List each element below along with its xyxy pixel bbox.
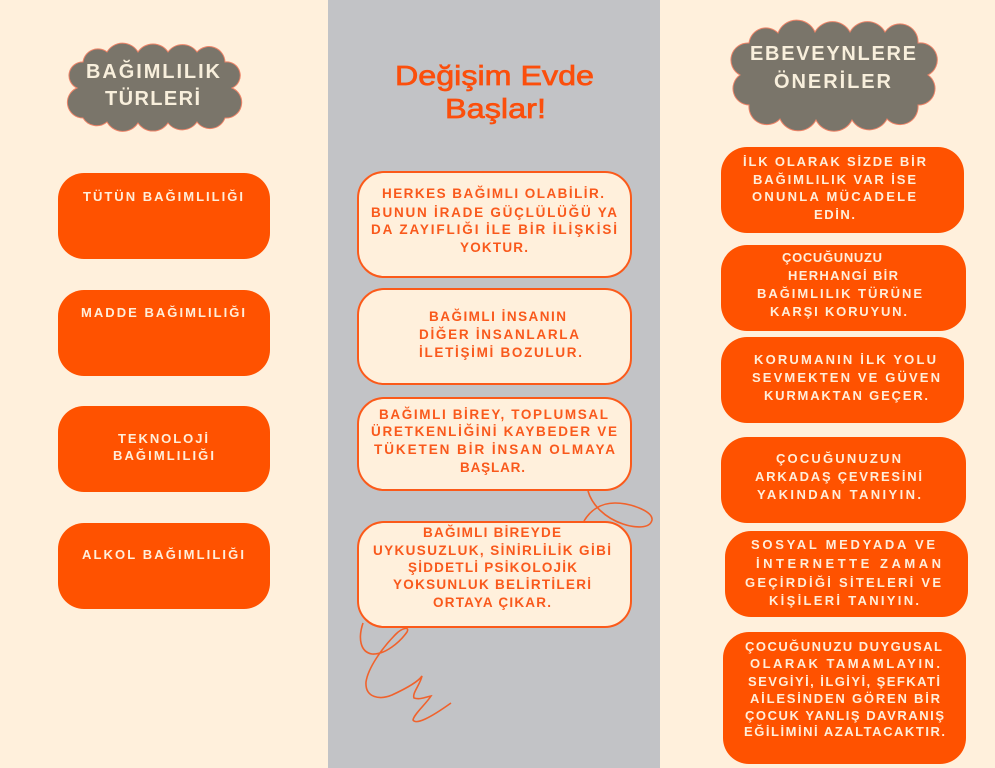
card: know their friends: ÇOCUĞUNUZUN — [776, 451, 901, 466]
card: loss of productivity — [358, 398, 631, 490]
card: withdrawal symptoms: ORTAYA ÇIKAR. — [433, 595, 551, 610]
title: Değişim Evde — [395, 60, 594, 91]
card: communication breaks down: BAĞIMLI İNSANIN — [429, 309, 566, 324]
panel: advice for parents — [721, 20, 968, 764]
card: emotional fulfilment: SEVGİYİ, İLGİYİ, ŞEFKATİ — [748, 674, 940, 689]
card: loss of productivity: BAĞIMLI BİREY, TOPLUMSAL — [379, 407, 608, 422]
card: know their friends: YAKINDAN TANIYIN. — [757, 487, 921, 502]
card: anyone can be addicted: YOKTUR. — [460, 240, 528, 255]
card: anyone can be addicted — [358, 172, 631, 277]
card: protect your child: ÇOCUĞUNUZU — [782, 250, 882, 265]
card: fight your own addiction: ONUNLA MÜCADELE — [752, 189, 916, 204]
decorative squiggle: lower — [360, 623, 451, 722]
card: substance addiction — [58, 290, 270, 376]
card: tobacco addiction — [58, 173, 270, 259]
card: loss of productivity: TÜKETEN BİR İNSAN OLMAYA — [374, 442, 615, 457]
card: know their friends: ARKADAŞ ÇEVRESİNİ — [755, 469, 922, 484]
card: emotional fulfilment — [723, 632, 966, 764]
heading: addiction types cloud: BAĞIMLILIK — [86, 59, 221, 83]
heading: advice for parents cloud — [731, 20, 937, 131]
panel: center messages — [358, 172, 631, 627]
card: withdrawal symptoms: YOKSUNLUK BELİRTİLERİ — [393, 577, 591, 592]
card: anyone can be addicted: DA ZAYIFLIĞI İLE BİR İLİŞKİSİ — [371, 222, 617, 237]
card: emotional fulfilment: ÇOCUĞUNUZU DUYGUSAL — [745, 639, 942, 654]
card: social media awareness — [725, 531, 968, 617]
panel: addiction types — [58, 43, 270, 609]
heading: addiction types cloud: TÜRLERİ — [105, 87, 200, 110]
card: alcohol addiction: ALKOL BAĞIMLILIĞI — [82, 547, 244, 562]
panel: center column background — [328, 0, 660, 768]
decorative squiggle: upper — [584, 491, 652, 527]
card: technology addiction — [58, 406, 270, 492]
card: love and trust: SEVMEKTEN VE GÜVEN — [752, 370, 940, 385]
card: social media awareness: İNTERNETTE ZAMAN — [756, 556, 941, 571]
card: emotional fulfilment: EĞİLİMİNİ AZALTACAKTIR. — [744, 724, 945, 739]
card: withdrawal symptoms: UYKUSUZLUK, SİNİRLİLİK GİBİ — [373, 543, 611, 558]
card: love and trust: KORUMANIN İLK YOLU — [754, 352, 936, 367]
card: loss of productivity: ÜRETKENLİĞİNİ KAYBEDER VE — [371, 424, 617, 439]
card: love and trust: KURMAKTAN GEÇER. — [764, 388, 928, 403]
card: withdrawal symptoms: ŞİDDETLİ PSİKOLOJİK — [408, 560, 577, 575]
card: communication breaks down — [358, 289, 631, 384]
title: Başlar! — [445, 93, 546, 124]
card: emotional fulfilment: ÇOCUK YANLIŞ DAVRANIŞ — [745, 708, 944, 723]
card: technology addiction: BAĞIMLILIĞI — [113, 448, 214, 463]
card: withdrawal symptoms — [358, 522, 631, 627]
card: communication breaks down: İLETİŞİMİ BOZULUR. — [419, 345, 582, 360]
card: fight your own addiction: EDİN. — [814, 207, 855, 222]
title — [395, 60, 594, 124]
card: protect your child: HERHANGİ BİR — [788, 268, 899, 283]
card: social media awareness: GEÇİRDİĞİ SİTELERİ VE — [745, 575, 941, 590]
card: protect your child: KARŞI KORUYUN. — [770, 304, 907, 319]
card: alcohol addiction — [58, 523, 270, 609]
card: substance addiction: MADDE BAĞIMLILIĞI — [81, 305, 245, 320]
card: emotional fulfilment: AİLESİNDEN GÖREN BİR — [750, 691, 941, 706]
card: fight your own addiction: İLK OLARAK SİZDE BİR — [743, 154, 927, 169]
card: protect your child — [721, 245, 966, 331]
card: fight your own addiction — [721, 147, 964, 233]
card: loss of productivity: BAŞLAR. — [460, 460, 525, 475]
heading: advice for parents cloud: EBEVEYNLERE — [750, 43, 916, 65]
card: anyone can be addicted: BUNUN İRADE GÜÇLÜLÜĞÜ YA — [371, 205, 617, 220]
heading: advice for parents cloud: ÖNERİLER — [774, 70, 892, 93]
card: love and trust — [721, 337, 964, 423]
card: withdrawal symptoms: BAĞIMLI BİREYDE — [423, 525, 561, 540]
card: technology addiction: TEKNOLOJİ — [118, 431, 208, 446]
card: social media awareness: KİŞİLERİ TANIYIN. — [769, 593, 919, 608]
card: know their friends — [721, 437, 966, 523]
card: tobacco addiction: TÜTÜN BAĞIMLILIĞI — [83, 189, 243, 204]
card: social media awareness: SOSYAL MEDYADA VE — [751, 537, 935, 552]
card: emotional fulfilment: OLARAK TAMAMLAYIN. — [750, 656, 940, 671]
card: communication breaks down: DİĞER İNSANLARLA — [419, 327, 579, 342]
card: protect your child: BAĞIMLILIK TÜRÜNE — [757, 286, 922, 301]
heading: addiction types cloud — [67, 43, 242, 131]
card: fight your own addiction: BAĞIMLILIK VAR İSE — [753, 172, 916, 187]
card: anyone can be addicted: HERKES BAĞIMLI OLABİLİR. — [382, 186, 604, 201]
